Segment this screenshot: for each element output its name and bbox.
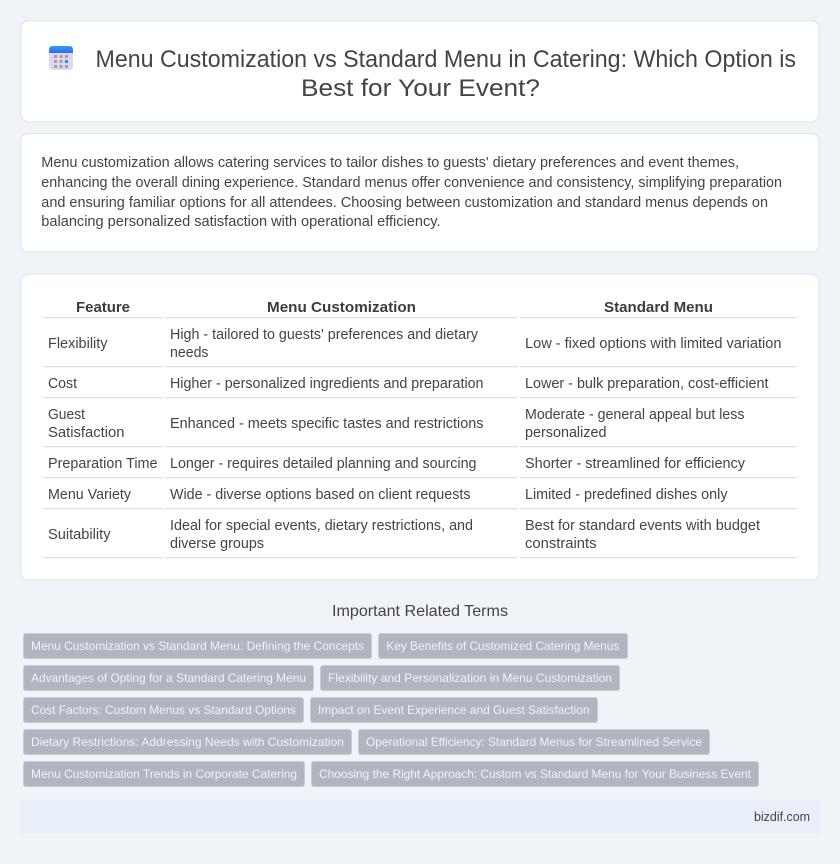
- row: suitability: constraints: [525, 536, 596, 552]
- row: suitability: diverse groups: [170, 536, 264, 552]
- row: flexibility: [48, 327, 782, 361]
- tag: [320, 666, 620, 690]
- tag: [24, 666, 314, 690]
- tag: [24, 762, 304, 786]
- footer: bizdif.com: [754, 809, 810, 824]
- row: cost: Cost: [48, 376, 77, 392]
- tag: Operational Efficiency: Standard Menus for Streamlined Service: [366, 735, 702, 749]
- tag: [378, 634, 628, 658]
- panel: comparison table: [21, 274, 819, 580]
- row: suitability: Suitability: [48, 527, 111, 543]
- tag: [312, 762, 758, 786]
- heading: important related terms: Important Related Terms: [332, 603, 508, 620]
- row: preparation time: Shorter - streamlined for efficiency: [525, 456, 746, 472]
- related term tags: [24, 634, 758, 786]
- title: Best for Your Event?: [301, 75, 540, 102]
- tag: [24, 634, 372, 658]
- panel: title header: [21, 21, 819, 122]
- row: preparation time: Longer - requires detailed planning and sourcing: [170, 456, 476, 472]
- row: flexibility: High - tailored to guests' preferences and dietary: [170, 327, 479, 343]
- row: guest satisfaction: Enhanced - meets specific tastes and restrictions: [170, 416, 484, 432]
- panel: introduction text: [21, 134, 819, 252]
- tag: [24, 698, 304, 722]
- row: menu variety: Wide - diverse options based on client requests: [170, 487, 470, 503]
- panel: introduction text: balancing personalized satisfaction with operational efficiency.: [41, 214, 441, 230]
- table header row: [76, 299, 713, 316]
- row: cost: Lower - bulk preparation, cost-efficient: [525, 376, 768, 392]
- tag: Advantages of Opting for a Standard Catering Menu: [31, 671, 306, 685]
- tag: Menu Customization Trends in Corporate Catering: [31, 767, 297, 781]
- panel: introduction text: enhancing the overall dining experience. Standard menus offer convenience and consistency, simplifying preparation: [41, 175, 782, 191]
- row: preparation time: Preparation Time: [48, 456, 158, 472]
- row: guest satisfaction: personalized: [525, 425, 606, 441]
- row: suitability: [48, 518, 760, 552]
- row: flexibility: Flexibility: [48, 336, 108, 352]
- row: guest satisfaction: Satisfaction: [48, 425, 124, 441]
- row: flexibility: needs: [170, 345, 208, 361]
- row: preparation time: [48, 456, 746, 472]
- tag: Dietary Restrictions: Addressing Needs with Customization: [31, 735, 344, 749]
- row: guest satisfaction: Guest: [48, 407, 85, 423]
- title: Menu Customization vs Standard Menu in Catering: Which Option is: [96, 46, 796, 73]
- tag: Menu Customization vs Standard Menu: Defining the Concepts: [31, 639, 364, 653]
- tag: [310, 698, 598, 722]
- panel: introduction text: Menu customization allows catering services to tailor dishes to guests' dietary preferences and event themes,: [41, 155, 739, 171]
- tag: Impact on Event Experience and Guest Satisfaction: [318, 703, 590, 717]
- row: menu variety: Limited - predefined dishes only: [525, 487, 728, 503]
- table header row: Standard Menu: [604, 299, 713, 316]
- tag: Choosing the Right Approach: Custom vs Standard Menu for Your Business Event: [319, 767, 752, 781]
- row: flexibility: Low - fixed options with limited variation: [525, 336, 782, 352]
- footer: [20, 800, 820, 834]
- icon: calendar: [49, 46, 73, 70]
- panel: introduction text: and ensuring familiar options for all attendees. Choosing between customization and standard menus depends on: [41, 195, 768, 211]
- row: suitability: Ideal for special events, dietary restrictions, and: [170, 518, 473, 534]
- row: cost: Higher - personalized ingredients and preparation: [170, 376, 484, 392]
- tag: Key Benefits of Customized Catering Menus: [386, 639, 619, 653]
- row: cost: [48, 376, 768, 392]
- table header row: Feature: [76, 299, 130, 316]
- row: guest satisfaction: Moderate - general appeal but less: [525, 407, 744, 423]
- tag: Flexibility and Personalization in Menu Customization: [328, 671, 612, 685]
- tag: [358, 730, 710, 754]
- row: suitability: Best for standard events with budget: [525, 518, 760, 534]
- row: menu variety: Menu Variety: [48, 487, 132, 503]
- tag: [24, 730, 352, 754]
- title: [96, 46, 796, 102]
- row: guest satisfaction: [48, 407, 744, 441]
- row: menu variety: [48, 487, 728, 503]
- tag: Cost Factors: Custom Menus vs Standard Options: [31, 703, 296, 717]
- table header row: Menu Customization: [267, 299, 416, 316]
